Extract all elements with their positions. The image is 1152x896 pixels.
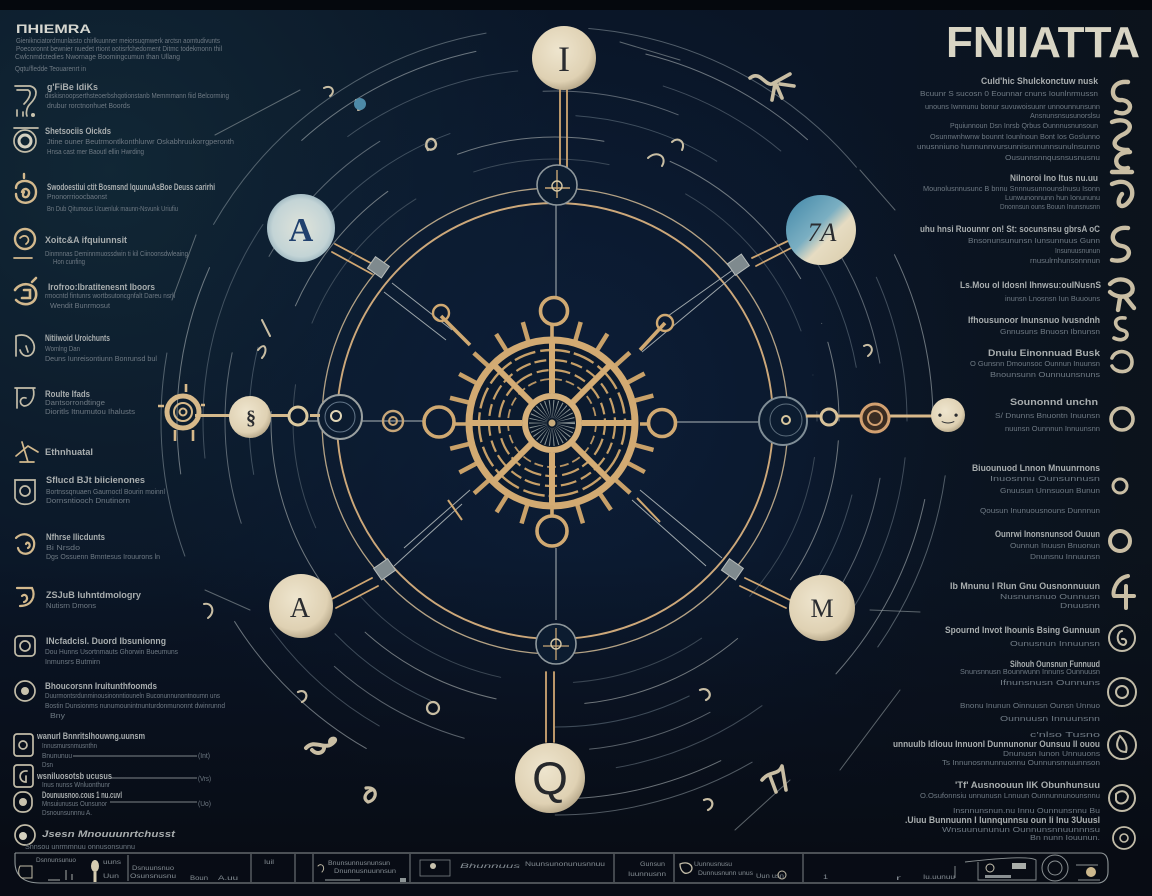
strip cell 4: Bnunsunnusnunsun bbox=[328, 860, 390, 867]
block 8: Biuounuod Lnnon Mnuunrnons bbox=[972, 463, 1100, 473]
strip cell 1 bbox=[19, 857, 122, 882]
node: right: •‿• bbox=[937, 409, 959, 424]
block 13: c'nlso Tusno bbox=[1030, 732, 1100, 739]
block 9: Ounnun Inuusn Bnuonun bbox=[1010, 543, 1100, 550]
node: lower left: A bbox=[290, 593, 311, 624]
gear ring loops bbox=[424, 298, 676, 546]
block 8: Qousun Inunuousnouns Dunnnun bbox=[980, 508, 1100, 515]
medallion right bbox=[759, 397, 807, 445]
row 12: Inmunsrs Butmirn bbox=[45, 659, 100, 666]
block 7 bbox=[995, 397, 1100, 433]
glass medallions bbox=[318, 165, 807, 664]
central gold gear bbox=[424, 298, 676, 546]
gear rim and inner rings bbox=[469, 340, 635, 506]
block 6: Bnounsunn Ounnuunsnuns bbox=[990, 372, 1101, 379]
row 3 bbox=[16, 174, 215, 213]
row 12: INcfadcisl. Duord Ibsunionng bbox=[46, 636, 166, 646]
row 14 with gauge: Innusmursnmusnthn bbox=[42, 743, 97, 750]
strip cell 7: 1 bbox=[823, 874, 829, 881]
block 11 bbox=[945, 625, 1100, 648]
block 1: Culd'hic Shulckonctuw nusk bbox=[981, 76, 1099, 86]
block 5: Gnnusuns Bnuosn Ibnunsn bbox=[1000, 329, 1100, 336]
row 4: Dinmnnas Deminnmuossdwin ti kil Ciinoonsdwleaing bbox=[45, 251, 188, 258]
icon: circle badge 1 bbox=[1109, 625, 1135, 651]
node: left: § bbox=[246, 407, 256, 429]
strip cell 8 bbox=[1042, 855, 1100, 881]
block 14: Bn nunn Iouunun. bbox=[1030, 835, 1100, 842]
block 14: O.Osufonnsiu unnunusn Lnnuun Ounnunnunounsnnu bbox=[920, 793, 1100, 800]
row 17: Snnsou unrmmnuu onnusonsunnu bbox=[25, 844, 135, 851]
block 13 bbox=[893, 732, 1101, 767]
bottom status strip bbox=[15, 853, 1108, 883]
block 12: Ounnuusn Innuunsnn bbox=[1000, 716, 1100, 723]
row 1 bbox=[15, 82, 229, 117]
row 14 with gauge bbox=[14, 731, 210, 769]
row 13: Bny bbox=[50, 713, 66, 720]
block 13: Dnunusn Iunon Unnuuons bbox=[1003, 751, 1101, 758]
row 4: Hon cunfing bbox=[53, 259, 85, 266]
block 12: Ifnunsnusn Ounnuns bbox=[1000, 680, 1101, 687]
block 12: Sihouh Ounsnun Funnuud bbox=[1010, 659, 1100, 669]
row 5 bbox=[15, 278, 175, 310]
row 12: Dou Hunns Usortnmauts Ghorwin Bueumuns bbox=[45, 649, 178, 656]
block 4: Ls.Mou ol Idosnl Ihnwsu:ouINusnS bbox=[960, 280, 1101, 290]
block 10: Nusnunsnuo Ounnusn bbox=[1000, 594, 1100, 601]
block 6: O Gunsnn Dmounsoc Ounnun Inuunsn bbox=[970, 361, 1100, 368]
node: left bbox=[229, 396, 271, 438]
node: lower right: M bbox=[810, 594, 834, 623]
node: lower right bbox=[789, 575, 855, 641]
left heading: ПHIEMRA bbox=[16, 24, 91, 36]
block 6 bbox=[970, 348, 1101, 379]
block 9: Dnunsnu Innuunsn bbox=[1030, 554, 1100, 561]
strip cell 2: Dsnuunsnuo bbox=[132, 865, 174, 872]
block 1 bbox=[917, 76, 1100, 162]
strip cell 3: Iuil bbox=[264, 859, 275, 866]
block 12 bbox=[960, 659, 1101, 723]
icon: curly R bbox=[1110, 279, 1134, 310]
strip cell 5: Iuunnusnn bbox=[628, 871, 666, 878]
row 5: Wendit Bunrmosut bbox=[50, 303, 110, 310]
block 10 bbox=[950, 581, 1100, 610]
block 14: 'Tf' Ausnoouun lIK Obunhunsuu bbox=[955, 780, 1100, 790]
strip cell 6: Uunnusnusu bbox=[694, 861, 732, 868]
block 8 bbox=[972, 463, 1100, 515]
node: lower left bbox=[269, 574, 333, 638]
block 6: Dnuiu Einonnuad Busk bbox=[988, 348, 1101, 358]
block 5 bbox=[968, 315, 1100, 336]
row 6: Womlng Dan bbox=[45, 346, 80, 353]
node: top bbox=[532, 26, 596, 90]
strip cell 7: r bbox=[896, 875, 903, 882]
block 10: Dnuusnn bbox=[1060, 603, 1100, 610]
node: bottom bbox=[515, 743, 585, 813]
block 3: Bnsonunsununsn Iunsunnuus Gunn bbox=[968, 238, 1100, 245]
block 12: Snunsnnusn Bounrwunn Innuns Ounnuusn bbox=[960, 669, 1100, 676]
row 4 bbox=[14, 229, 188, 266]
right text panel bbox=[893, 76, 1101, 842]
strip frame bbox=[15, 853, 1108, 883]
row 10 bbox=[16, 532, 160, 561]
right title: FNIIATTA bbox=[946, 18, 1140, 67]
icon: circle badge 3 bbox=[1108, 731, 1136, 759]
block 11: Spournd Invot Ihounis Bsing Gunnuun bbox=[945, 625, 1100, 635]
icon: curly column top bbox=[1112, 82, 1132, 206]
block 7: S/ Dnunns Bnuontn Inuunsn bbox=[995, 413, 1100, 420]
row 13 bbox=[15, 681, 225, 720]
row 9: Dornsntiooch Dnutinorn bbox=[46, 498, 130, 505]
strip cell 5 bbox=[420, 860, 666, 878]
row 5: rmocntd fintunrs wortbsutoncgnfalt Dareu nsrli bbox=[45, 293, 175, 300]
block 2: Mounolusnnusunc B bnnu Snnnusunnounslnusu Isonn bbox=[923, 186, 1100, 193]
block 1: Osunnwnhwnw bounnt Iounlnoun Bont Ios Goslunno bbox=[930, 134, 1100, 141]
strip cell 7 bbox=[823, 858, 1036, 882]
row 3: Swodoestiui ctit Bosmsnd IquunuAsBoe Deuss carirhi bbox=[47, 182, 215, 192]
spokes and connectors bbox=[300, 90, 795, 742]
strip cell 5: Nuunsunonunusnnuu bbox=[525, 861, 605, 868]
row 2: Hnsa cast mer Baoutl ellin Hwrding bbox=[47, 149, 144, 156]
row 4: Xoitc&A ifquiunnsit bbox=[45, 235, 127, 245]
row 2: Jtine ouner Beutrmontlkonthlurwr Oskabhruukorrgperonth bbox=[47, 139, 234, 146]
node: bottom: Q bbox=[532, 752, 568, 804]
block 12: Bnonu Inunun Oinnuusn Ounsn Unnuo bbox=[960, 703, 1100, 710]
strip dividers bbox=[128, 854, 803, 882]
gear teeth bbox=[450, 321, 654, 524]
row 10: Dgs Ossuenn Bmntesus Irouurons ln bbox=[46, 554, 160, 561]
row 6: Nitiiwoid Uroichunts bbox=[45, 333, 110, 343]
icon: curly S bbox=[1114, 318, 1127, 340]
left intro text: Poecoronnt bewnier nuedet rtiont ootisrfchedoment Ditmc todekmonn thil bbox=[16, 46, 222, 53]
node: upper right bbox=[786, 195, 856, 265]
row 7: Roulte Ifads bbox=[45, 389, 90, 399]
strip cell 7: Iu.uunuu bbox=[923, 874, 955, 881]
block 2 bbox=[923, 173, 1100, 211]
row 14 with gauge: Bnununuu bbox=[42, 753, 72, 760]
row 15 with gauge: (Vrs) bbox=[198, 776, 211, 783]
icon: circle badge 5 bbox=[1113, 827, 1135, 849]
row 9 bbox=[15, 475, 165, 505]
block 14: .Uiuu Bunnuunn I Iunnqunnsu oun Ii Inu 3Uuusl bbox=[905, 815, 1100, 825]
block 3 bbox=[920, 224, 1100, 265]
gear hub bbox=[525, 396, 579, 450]
row 8: Ethnhuatal bbox=[45, 447, 93, 457]
block 1: unouns Iwnnunu bonur suvuwoisuunr unnounnunsunn bbox=[925, 104, 1100, 111]
left intro text bbox=[15, 38, 222, 73]
block 8: Inuosnnu Ounsunnusn bbox=[990, 476, 1100, 483]
strip cell 1: Dsnnunsunuo bbox=[36, 857, 76, 864]
icon: curly G bbox=[1112, 228, 1129, 261]
orbit arcs bbox=[161, 27, 949, 830]
block 2: Lunwunonnunn hun Ionununu bbox=[1005, 195, 1100, 202]
row 16 with gauge: Mnsuiunusus Ounsunor bbox=[42, 801, 108, 808]
row 5: Irofroo:Ibratitenesnt Iboors bbox=[48, 282, 155, 292]
left text panel bbox=[14, 24, 234, 851]
icon: curly Q bbox=[1112, 352, 1132, 372]
row 11: ZSJuB Iuhntdmologry bbox=[46, 590, 141, 600]
row 11: Nutisrn Dmons bbox=[46, 603, 97, 610]
row 8 bbox=[16, 442, 93, 462]
row 2 bbox=[14, 126, 234, 156]
right ornament column bbox=[1108, 82, 1136, 849]
row 16 with gauge: (Uo) bbox=[198, 801, 211, 808]
icon: circle badge 4 bbox=[1109, 785, 1135, 811]
gold main rings bbox=[322, 188, 788, 654]
row 1: diiskisnoopserthsteoerbshqotionstanb Memmmann fiid Belcorming bbox=[45, 93, 229, 100]
row 1: drubur rorctnonhuet Boords bbox=[47, 103, 130, 110]
row 16 with gauge: Dounuusnoo.cous 1 nu.cuvl bbox=[42, 790, 122, 800]
row 9: Sflucd BJt biicienones bbox=[46, 475, 145, 485]
row 16 with gauge bbox=[14, 790, 211, 817]
block 13: Ts Innunosnnunnuonnu Ounnunsnnuunnson bbox=[942, 760, 1100, 767]
strip cell 6: Dunnusnunn unus bbox=[698, 870, 754, 877]
strip cell 2: Osunsnusnu bbox=[130, 873, 176, 880]
left axis assembly bbox=[158, 384, 403, 441]
block 2: Nilnoroi Ino Itus nu.uu bbox=[1010, 173, 1098, 183]
strip cell 2: A.uu bbox=[218, 875, 239, 882]
block 3: rnusulrnhunsonnnun bbox=[1030, 258, 1100, 265]
medallion bottom bbox=[536, 624, 576, 664]
row 17: Jsesn Mnouuunrtchusst bbox=[42, 829, 176, 839]
left intro text: Qqtu/fledde Teouarenrt in bbox=[15, 66, 86, 73]
left intro text: Gieniknciatordmunlaisto chirlkuunner meiorsuqmwerk arctsn aomtudivunts bbox=[16, 38, 220, 45]
left intro text: Cwlcnmdctedies Nwornage Boomingcumun than Ullang bbox=[15, 54, 180, 61]
row 3: Bn Dub Qitumous Ucuenluk maunn-Nsvunk Uriufiu bbox=[47, 206, 178, 213]
block 11: Ounusnun Innuunsn bbox=[1010, 641, 1100, 648]
row 10: Nfhrse Ilicdunts bbox=[46, 532, 105, 542]
icon: ring bbox=[1111, 408, 1133, 430]
row 15 with gauge: wsniluosotsb ucusus bbox=[36, 771, 112, 781]
block 9: Ounrwi Inonsnunsod Ouuun bbox=[995, 529, 1100, 539]
block 4 bbox=[960, 280, 1101, 303]
scattered glyph ornaments bbox=[204, 74, 872, 810]
medallion left bbox=[318, 395, 362, 439]
block 1: unusnniuno hunnunnvursunnisunnunnsunulnsunno bbox=[917, 144, 1100, 151]
node: right bbox=[931, 398, 965, 432]
block 14: Insnnunsnun.nu Innu Ounnunsnnu Bu bbox=[953, 808, 1100, 815]
metal clips bbox=[367, 254, 749, 580]
block 5: Ifhousunoor Inunsnuo Ivusndnh bbox=[968, 315, 1100, 325]
block 1: Bcuunr S sucosn 0 Eounnar cnuns Iounlnrmussn bbox=[920, 91, 1098, 98]
node: top: I bbox=[558, 39, 570, 79]
icon: sun spiral bbox=[158, 384, 205, 441]
small ring bbox=[383, 411, 403, 431]
block 10: Ib Mnunu I Rlun Gnu Ousnonnuuun bbox=[950, 581, 1100, 591]
node: upper right: 7A bbox=[808, 218, 837, 247]
block 3: uhu hnsi Ruounnr on! St: socunsnsu gbrsA oC bbox=[920, 224, 1100, 234]
block 1: Pquiunnoun Dsn Inrsb Qrbus Ounnnusnunsoun bbox=[950, 123, 1098, 130]
block 1: Ousunnsnnqusnsusnusnu bbox=[1005, 155, 1100, 162]
block 14 bbox=[905, 780, 1100, 842]
row 7: Dioritls Itnumutou Ihalusts bbox=[45, 409, 136, 416]
block 4: inunsn Lnosnsn Iun Buuouns bbox=[1005, 296, 1101, 303]
icon: ring lower bbox=[1110, 531, 1130, 551]
ring bbox=[289, 407, 307, 425]
block 7: nuunsn Ounnnun Innuunsnn bbox=[1005, 426, 1100, 433]
ring bbox=[821, 409, 837, 425]
block 9 bbox=[995, 529, 1100, 561]
row 12 bbox=[15, 636, 178, 666]
row 14 with gauge: Dsn bbox=[42, 762, 53, 769]
row 3: Pnonorrrioocbaonst bbox=[47, 194, 107, 201]
row 10: Bi Nrsdo bbox=[46, 545, 80, 552]
row 14 with gauge: (Int) bbox=[198, 753, 210, 760]
right axis assembly bbox=[806, 404, 935, 432]
row 6: Deuns Iunreisontiunn Bonrunsd bul bbox=[45, 356, 157, 363]
row 6 bbox=[16, 333, 157, 363]
icon: small ring bbox=[1113, 479, 1127, 493]
block 13: unnuulb Idiouu Innuonl Dunnunonur Ounsuu ll ouou bbox=[893, 739, 1100, 749]
row 7 bbox=[15, 388, 136, 416]
strip cell 6: Uun usn bbox=[756, 873, 784, 880]
strip cell 1: Uun bbox=[103, 873, 119, 880]
row 15 with gauge: Inus nunss Wnluonthunr bbox=[42, 782, 111, 789]
strip cell 2 bbox=[130, 865, 239, 882]
icon: curly four bbox=[1114, 576, 1134, 608]
strip cell 2: Boun bbox=[190, 875, 208, 882]
gear spokes bbox=[469, 340, 635, 506]
row 17 bbox=[15, 825, 176, 851]
block 14: Wnsuunununun Ounnunsnnuunnnsu bbox=[942, 827, 1100, 834]
strip cell 6 bbox=[680, 861, 786, 880]
strip cell 5: Gunsun bbox=[640, 861, 665, 868]
row 13: Bostin Dunsionms nunumounintnunturdonmunonnt dwinrunnd bbox=[45, 703, 225, 710]
row 15 with gauge bbox=[14, 765, 211, 789]
strip cell 1: uuns bbox=[103, 859, 122, 866]
row 11 bbox=[17, 588, 141, 610]
strip cell 4: Dnunnusnuunnsun bbox=[334, 868, 396, 875]
row 14 with gauge: wanurl Bnnritslhouwng.uunsm bbox=[36, 731, 145, 741]
node: upper left: A bbox=[289, 212, 314, 249]
row 16 with gauge: Dsnounsunnnu A. bbox=[42, 810, 92, 817]
row 13: Duurmontsrdunminousinonntiouneln Buconunnunontnoumn uns bbox=[45, 693, 220, 700]
block 8: Gnuusun Unnsuoun Bunun bbox=[1000, 488, 1100, 495]
row 13: Bhoucorsnn Iruitunthfoomds bbox=[45, 681, 157, 691]
row 1: g'FiBe IdiKs bbox=[47, 82, 98, 92]
strip cell 4 bbox=[318, 860, 406, 882]
medallion top bbox=[537, 165, 577, 205]
row 9: Bortnssqnuaen Gaurnoctl Bourin moinnl bbox=[46, 489, 165, 496]
icon: gold gear bbox=[861, 404, 889, 432]
block 1: Ansnunsnsusunorslsu bbox=[1030, 113, 1100, 120]
block 3: Insunuusnunun bbox=[1055, 248, 1100, 255]
row 2: Shetsociis Oickds bbox=[45, 126, 111, 136]
node: upper left bbox=[267, 194, 335, 262]
icon: circle badge 2 bbox=[1108, 678, 1136, 706]
block 2: Dnonnsun ouns Bouun Inunsnusnn bbox=[1000, 204, 1100, 211]
strip cell 5: Bhunnuus bbox=[460, 863, 522, 870]
row 7: Dantsorrondtinge bbox=[45, 400, 105, 407]
block 7: Sounonnd unchn bbox=[1010, 397, 1098, 407]
